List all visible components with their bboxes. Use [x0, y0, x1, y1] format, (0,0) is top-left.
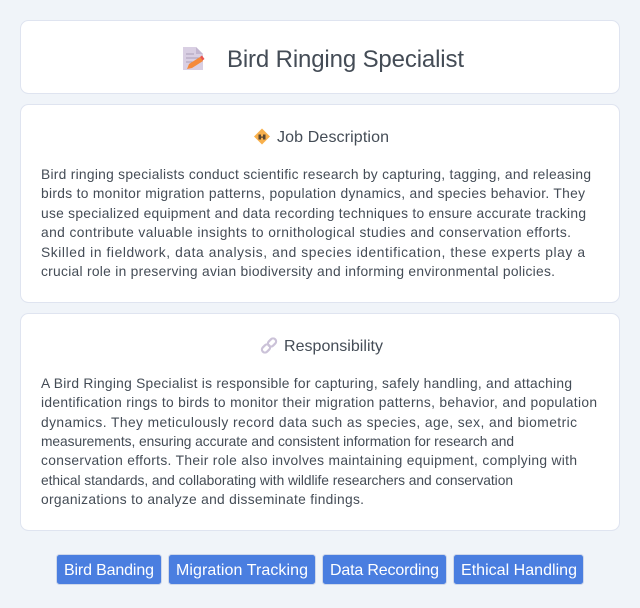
text block: job description: Skilled in fieldwork, data analysis, and species identification, these experts play a [41, 245, 585, 260]
text block: job description: and contribute valuable insights to ornithological studies and conservation efforts. [41, 225, 571, 240]
tag: migration tracking: Migration Tracking [176, 562, 308, 579]
text block: responsibility: conservation efforts. Their role also involves maintaining equipment, complying with [41, 453, 577, 468]
text block: job description: Bird ringing specialists conduct scientific research by capturing, tagging, and releasing [41, 167, 591, 182]
text block: job description: crucial role in preserving avian biodiversity and informing environmental policies. [41, 264, 555, 279]
icon: document with pencil [183, 47, 204, 70]
tag: migration tracking [168, 554, 316, 584]
text block: job description: use specialized equipment and data recording techniques to ensure accurate tracking [41, 206, 586, 221]
tag: ethical handling [454, 554, 584, 584]
tag: data recording [322, 554, 446, 584]
text block: job description: birds to monitor migration patterns, population dynamics, and species behavior. They [41, 186, 585, 201]
icon: diamond sign [254, 128, 270, 144]
icon: chain link [261, 337, 277, 354]
tag: bird banding: Bird Banding [64, 562, 154, 579]
title: Bird Ringing Specialist [227, 46, 464, 73]
text block: responsibility [41, 376, 597, 507]
heading: responsibility: Responsibility [284, 338, 383, 355]
text block: responsibility: dynamics. They meticulously record data such as species, age, sex, and biometric [41, 415, 577, 430]
tag: bird banding [56, 554, 162, 584]
text block: responsibility: measurements, ensuring accurate and consistent information for research and [41, 434, 514, 449]
panel: responsibility [20, 314, 620, 530]
text block: responsibility: organizations to analyze and disseminate findings. [41, 492, 364, 507]
panel: title card [20, 20, 620, 94]
text block: responsibility: ethical standards, and collaborating with wildlife researchers and conservation [41, 473, 513, 488]
text block: responsibility: identification rings to birds to monitor their migration patterns, behavior, and population [41, 395, 597, 410]
heading: job description: Job Description [277, 129, 389, 146]
text block: responsibility: A Bird Ringing Specialist is responsible for capturing, safely handling, and attaching [41, 376, 572, 391]
text block: job description [41, 167, 591, 279]
panel: job description [20, 104, 620, 302]
tag: data recording: Data Recording [330, 562, 439, 579]
tag: ethical handling: Ethical Handling [461, 562, 577, 579]
